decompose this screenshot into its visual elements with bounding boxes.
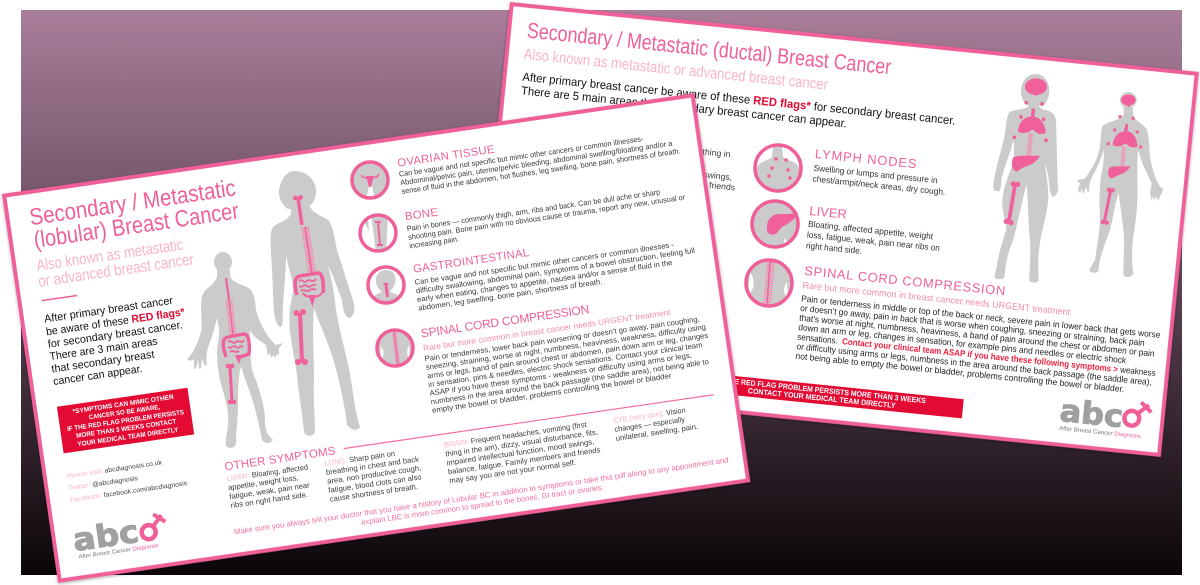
spinal cord compression text: or difficulty using arms or legs, numbness in the area around the back passage (the saddle area), <box>796 341 1152 387</box>
lung symptoms: fatigue, blood clots can also <box>328 472 422 495</box>
red flag banner: CONTACT YOUR MEDICAL TEAM DIRECTLY <box>747 386 896 410</box>
bone text <box>404 171 687 250</box>
gastrointestinal text: abdomen, leg swelling, bone pain, shortness of breath. <box>418 277 603 313</box>
spinal cord compression text: SPINAL CORD COMPRESSION <box>804 263 1006 298</box>
intro text: After primary breast cancer be aware of these RED flags* for secondary breast cancer. <box>522 70 956 128</box>
spinal cord compression text: down an arm or leg, changes in sensation, for example pins and needles or electric shock <box>798 322 1127 365</box>
red flag banner: IF THE RED FLAG PROBLEM PERSISTS MORE THAN 3 WEEKS <box>717 375 926 405</box>
lung symptoms: cause shortness of breath. <box>329 482 418 504</box>
intro text: cancer can appear. <box>52 363 143 388</box>
gastrointestinal text <box>412 223 698 313</box>
intro text: There are 5 main areas that secondary breast cancer can appear. <box>520 83 848 130</box>
red flag callout: CANCER SO BE AWARE, <box>88 404 161 421</box>
title: (lobular) Breast Cancer <box>32 197 241 253</box>
liver symptoms <box>226 463 312 510</box>
lymph nodes text: LYMPH NODES <box>814 146 917 171</box>
logo: abc <box>1058 394 1125 435</box>
figure: small back-view body <box>187 252 283 448</box>
ovarian tissue text: Abdominal/pelvic pain, uterine/pelvic bleeding, abdominal swelling/bloating and/or a <box>400 139 674 187</box>
brain symptoms: BRAIN: Frequent headaches, vomiting (first <box>443 420 588 450</box>
spinal cord compression text: Pain or tenderness, lower back pain worsening or doesn’t go away, pain coughing, <box>424 314 700 363</box>
brain symptoms: impaired intellectual function, mood swings, <box>446 437 595 467</box>
liver symptoms: LIVER: Bloating, affected <box>226 463 309 483</box>
bone text: increasing pain. <box>409 234 459 250</box>
brain symptoms: balance, fatigue. Family members and friends <box>447 445 601 476</box>
icon: spine <box>377 330 413 366</box>
brain symptoms: thing in the am), dizzy, visual disturbance, fits, <box>445 427 598 459</box>
eye symptoms <box>613 404 699 443</box>
spinal cord compression text: in sensation, pins & needles, electric shock sensations. Contact your clinical team <box>428 340 703 389</box>
ovarian tissue text <box>397 117 681 196</box>
logo <box>1058 394 1152 441</box>
icon: lymph nodes <box>755 145 803 195</box>
ovarian tissue text: Can be vague and not specific but mimic other cancers or common illnesses- <box>398 134 644 179</box>
red flag callout: IF THE RED FLAG PROBLEM PERSISTS <box>67 409 185 433</box>
spinal cord compression text: ASAP if you have these symptoms - weakness or difficulty using arms or legs, <box>429 351 692 398</box>
lung symptoms <box>324 445 424 504</box>
panel: lobular breast cancer card <box>4 95 748 581</box>
title: Secondary / Metastatic <box>28 174 237 230</box>
figure: large woman <box>993 74 1058 283</box>
liver symptoms: ribs on right hand side. <box>230 490 308 510</box>
contact details: Twitter: @abcdiagnosis <box>68 475 139 492</box>
logo: abc <box>71 514 141 559</box>
spinal cord compression text <box>420 286 714 415</box>
gastrointestinal text: difficulty swallowing, abdominal pain, symptoms of a bowel obstruction, feeling full <box>415 246 696 295</box>
logo: After Breast Cancer Diagnosis <box>1059 426 1141 440</box>
intro text: that secondary breast <box>51 349 155 376</box>
spinal cord compression text: not being able to empty the bowel or bladder, problems controlling the bowel or bladder. <box>795 351 1125 394</box>
icon: ovary <box>352 162 388 200</box>
figure: small woman <box>1077 92 1163 277</box>
liver text: right hand side. <box>806 240 863 256</box>
gastrointestinal text: early when eating, changes to appetite, nausea and/or a sense of fluid in the <box>416 258 673 304</box>
contact details: Please visit: abcdiagnosis.co.uk <box>66 459 163 480</box>
icon: bone <box>360 215 396 252</box>
lung symptoms: breathing in chest and back <box>325 454 420 477</box>
red flag callout: MORE THAN 3 WEEKS CONTACT <box>76 418 177 440</box>
red flag callout: YOUR MEDICAL TEAM DIRECTLY <box>77 427 179 448</box>
lymph nodes text <box>812 146 949 197</box>
liver text: loss, fatigue, weak, pain near ribs on <box>807 230 941 253</box>
figures: women with metastatic sites <box>993 74 1163 283</box>
liver symptoms: appetite, weight loss, <box>227 473 299 492</box>
partly hidden brain text <box>645 141 740 193</box>
subtitle: Also known as metastatic <box>35 237 184 275</box>
bone text: BONE <box>404 207 439 223</box>
spinal cord compression text: arms or legs, band of pain around chest or abdomen, pain down arm or leg, changes <box>426 331 709 381</box>
liver text: Bloating, affected appetite, weight <box>808 219 934 241</box>
icon: gastrointestinal <box>368 267 404 305</box>
subtitle: Also known as metastatic or advanced breast cancer <box>523 46 829 94</box>
other symptoms heading: OTHER SYMPTOMS <box>224 445 337 473</box>
spinal cord compression text: sensations. Contact your clinical team ASAP if you have these following symptoms > weakness <box>797 332 1157 378</box>
eye symptoms: changes — especially <box>614 415 686 434</box>
icon: liver <box>745 200 798 252</box>
intro text: There are 3 main areas <box>49 335 159 363</box>
ovarian tissue text: OVARIAN TISSUE <box>397 144 496 170</box>
footer note: explain LBC is more common to spread to the bones, GI tract or ovaries. <box>361 483 604 527</box>
eye symptoms: unilateral, swelling, pain. <box>615 422 699 443</box>
spinal cord compression text: Rare but more common in breast cancer needs URGENT treatment <box>802 280 1071 317</box>
spinal cord compression text: Rare but more common in breast cancer needs URGENT treatment <box>422 307 672 353</box>
bone text: Pain in bones — commonly thigh, arm, ribs and back. Can be dull ache or sharp <box>406 187 661 233</box>
partly hidden brain text: vomiting (first thing in <box>648 141 731 159</box>
intro text: After primary breast cancer <box>43 295 174 325</box>
red flag callout: *SYMPTOMS CAN MIMIC OTHER <box>72 394 174 416</box>
spinal cord compression text: empty the bowel or bladder, problems controlling the bowel or bladder <box>431 371 673 415</box>
lung symptoms: area, non productive cough, <box>327 463 422 486</box>
intro text <box>43 293 193 388</box>
lymph nodes text: chest/armpit/neck areas, dry cough. <box>812 174 946 197</box>
ovarian tissue text: sense of fluid in the abdomen, hot flushes, leg swelling, bone pain, shortness of breath. <box>401 146 681 196</box>
lung symptoms: LUNG: Sharp pain on <box>324 449 395 468</box>
logo <box>71 510 169 561</box>
footer note: Make sure you always tell your doctor that you have a history of Lobular BC in addition to symptoms or take this pdf along to any appointment and <box>233 455 729 536</box>
panel: ductal breast cancer card <box>474 4 1197 455</box>
intro text: for secondary breast cancer. <box>47 319 183 351</box>
gastrointestinal text: Can be vague and not specific but mimic other cancers or common illnesses - <box>414 240 675 287</box>
spinal cord compression text: Pain or tenderness in middle or top of the back or neck, severe pain in lower back that gets worse <box>801 293 1161 340</box>
lymph nodes text: Swelling or lumps and pressure in <box>813 163 938 185</box>
subtitle: or advanced breast cancer <box>37 251 196 291</box>
title: Secondary / Metastatic (ductal) Breast Cancer <box>526 18 892 79</box>
brain symptoms: may say you are not your normal self. <box>449 458 577 485</box>
figure: large front-view body <box>271 171 360 436</box>
contact details <box>66 456 188 504</box>
brain symptoms <box>443 418 602 485</box>
partly hidden brain text: mood swings, <box>679 167 733 182</box>
icon: spinal cord <box>746 260 792 306</box>
spinal cord compression text: or doesn’t go away, pain in back that is worse when coughing, sneezing or straining, back pain <box>800 303 1145 348</box>
red flag callout <box>57 388 194 453</box>
intro text: be aware of these RED flags* <box>45 306 186 338</box>
spinal cord compression text: numbness in the area around the back passage (the saddle area), not being able to <box>430 357 709 406</box>
spinal cord compression text <box>795 263 1164 397</box>
bone text: shooting pain. Bone pain with no obvious cause or trauma, report any new, unusual or <box>407 193 686 242</box>
liver symptoms: fatigue, weak, pain near <box>229 480 311 501</box>
red flag banner <box>492 352 964 418</box>
liver text: LIVER <box>809 203 848 222</box>
spinal cord compression text: SPINAL CORD COMPRESSION <box>420 302 590 340</box>
liver text <box>806 203 943 264</box>
eye symptoms: EYE (very rare): Vision <box>613 406 686 425</box>
spinal cord compression text: sneezing, straining, worse at night, numbness, heaviness, weakness, difficulty using <box>425 322 706 372</box>
partly hidden brain text: members and friends <box>653 174 736 193</box>
gastrointestinal text: GASTROINTESTINAL <box>412 247 530 276</box>
title <box>28 174 241 253</box>
spinal cord compression text: that’s worse at night, numbness, heaviness, a band of pain around the chest or abdomen or pain <box>799 313 1155 359</box>
contact details: Facebook: facebook.com/abcdiagnosis <box>70 480 188 504</box>
subtitle <box>35 235 196 291</box>
logo: After Breast Cancer Diagnosis <box>78 543 159 561</box>
